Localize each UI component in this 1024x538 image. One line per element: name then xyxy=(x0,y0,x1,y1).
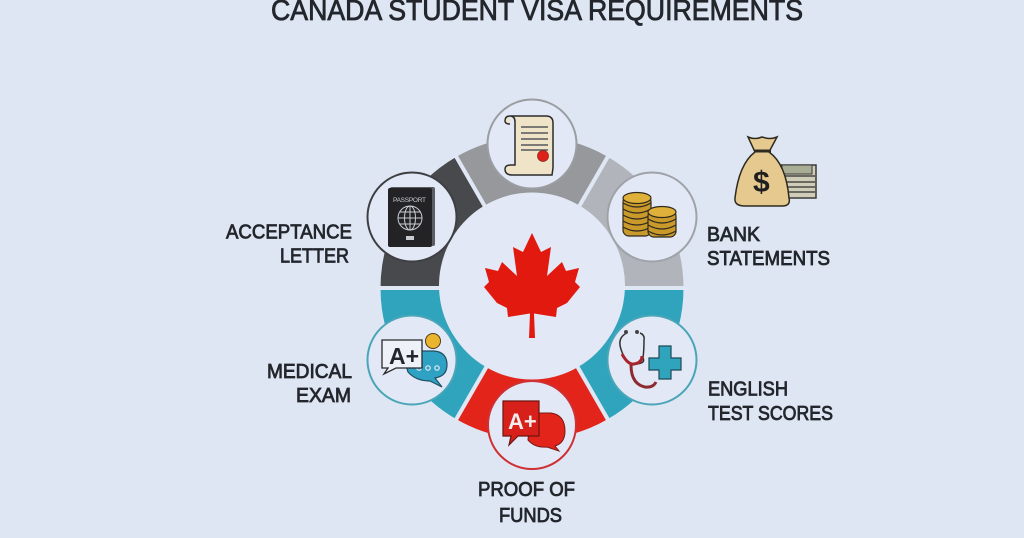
label: medical exam: EXAM xyxy=(296,385,351,407)
center circle xyxy=(439,192,625,378)
node: speech bubbles red xyxy=(488,381,576,469)
label: english test scores xyxy=(708,378,833,425)
label: acceptance letter: LETTER xyxy=(280,246,349,268)
label: proof of funds: FUNDS xyxy=(499,505,562,527)
icon: money bag and cash xyxy=(735,137,816,206)
node: coins xyxy=(608,172,696,262)
node: scroll document xyxy=(488,100,576,188)
ring diagram xyxy=(370,149,694,427)
node: speech bubbles red: A+ xyxy=(508,409,537,434)
label: acceptance letter xyxy=(226,222,352,268)
ring segment: dark xyxy=(410,183,471,288)
ring segment: mid grey xyxy=(471,167,593,183)
label: bank statements: STATEMENTS xyxy=(707,248,830,270)
label: proof of funds: PROOF OF xyxy=(478,479,575,501)
icon: money bag and cash: $ xyxy=(753,166,770,199)
label: proof of funds xyxy=(478,479,575,527)
label: english test scores: TEST SCORES xyxy=(708,403,833,425)
node: speech bubbles teal xyxy=(368,316,456,404)
label: acceptance letter: ACCEPTANCE xyxy=(226,222,352,244)
node: passport: PASSPORT xyxy=(393,197,426,204)
node: passport xyxy=(368,172,456,262)
label: bank statements xyxy=(707,224,830,270)
label: medical exam: MEDICAL xyxy=(267,361,352,383)
ring segment: light grey xyxy=(593,183,654,288)
node: speech bubbles teal: A+ xyxy=(389,343,419,369)
ring segment: red xyxy=(471,393,593,409)
label: english test scores: ENGLISH xyxy=(708,378,788,400)
node: stethoscope xyxy=(608,316,696,404)
label: bank statements: BANK xyxy=(707,224,761,246)
ring segment: teal left xyxy=(410,288,471,393)
icon: maple leaf xyxy=(484,233,580,338)
label: medical exam xyxy=(267,361,352,407)
ring segment: teal right xyxy=(593,288,654,393)
